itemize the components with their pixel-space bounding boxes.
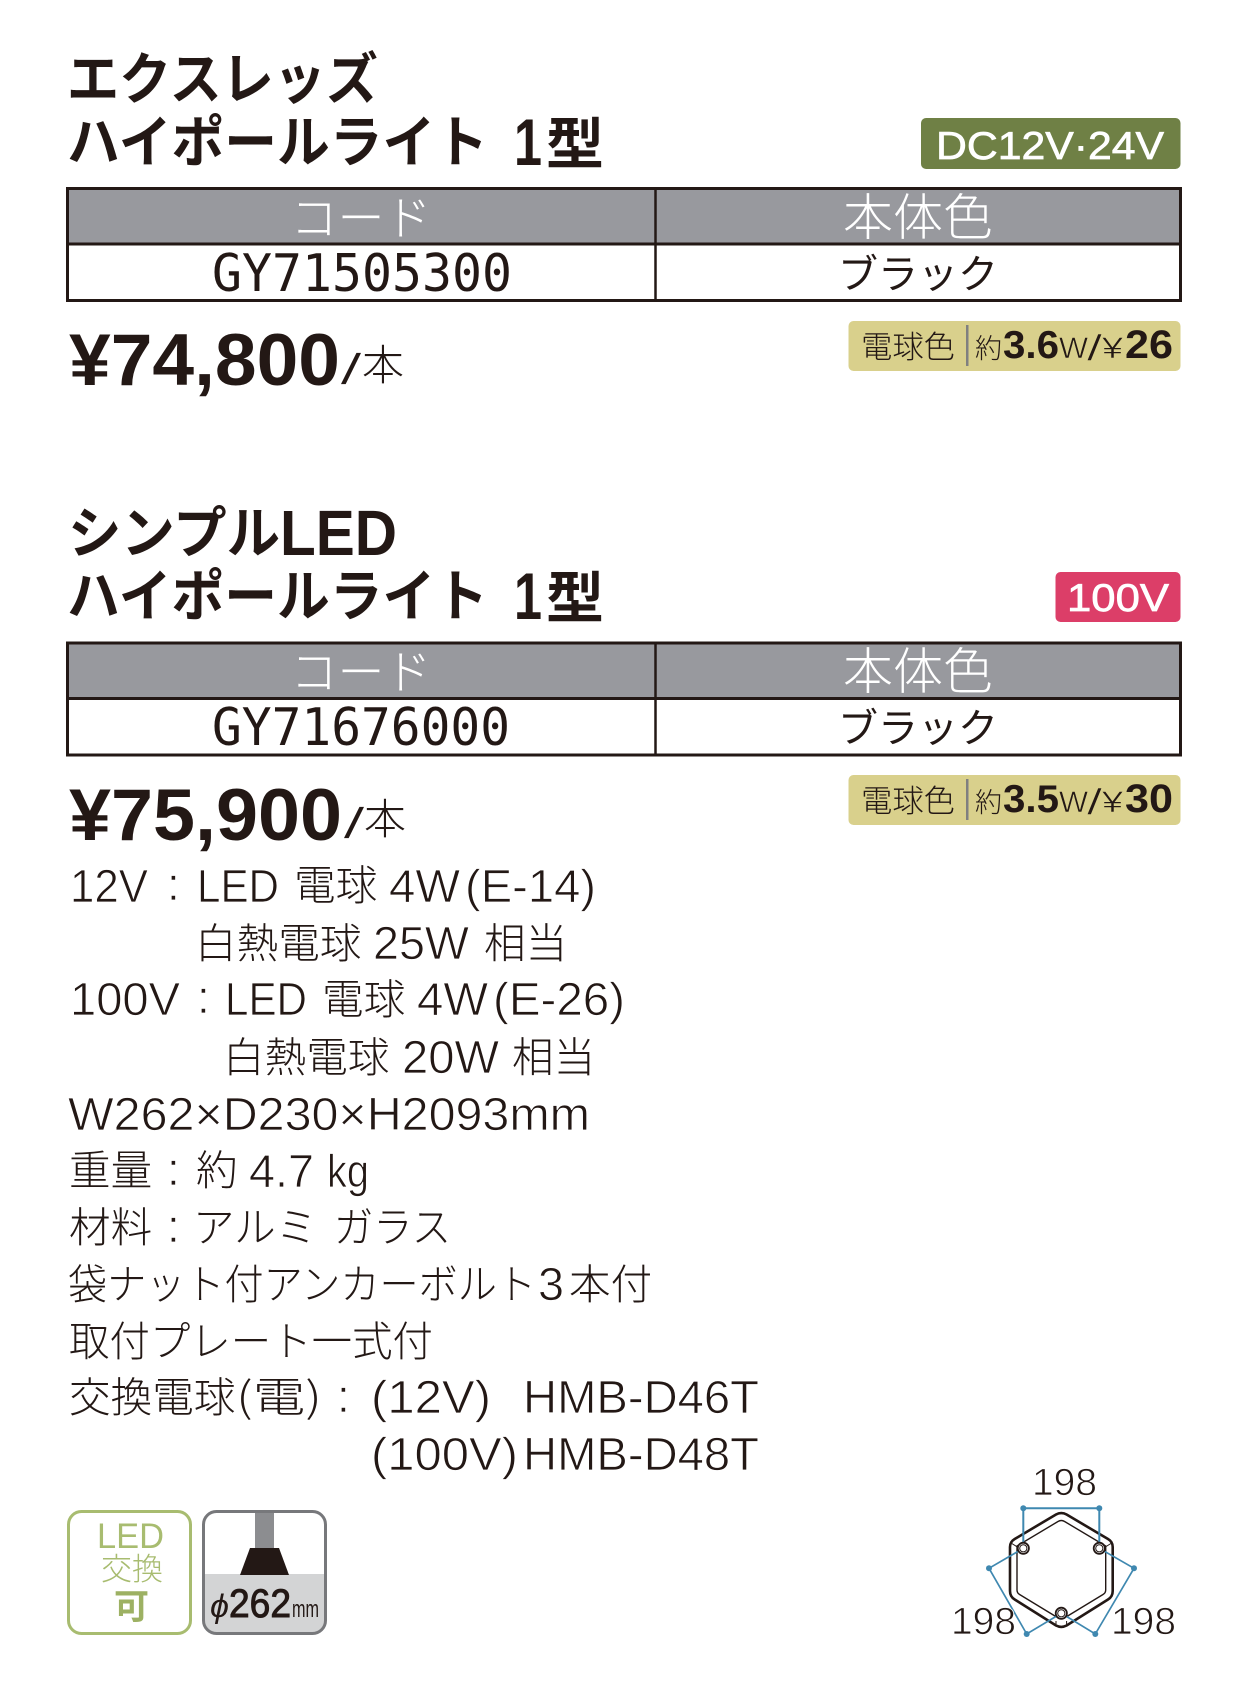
specification text block: 交換電球 xyxy=(69,1364,235,1424)
lamp colour badge: 電球色 約3.5W/¥30 xyxy=(848,775,1180,825)
title: シンプルLED ハイポールライト 1型: LED xyxy=(280,497,397,569)
specification text block: LED xyxy=(197,860,279,912)
specification text block: LED xyxy=(225,973,307,1025)
specification text block: (100V) xyxy=(371,1428,518,1480)
specification text block: 白熱電球 xyxy=(223,1024,389,1084)
lamp colour badge: 電球色 約3.5W/¥30: W xyxy=(1059,786,1089,819)
dimension lines xyxy=(989,1508,1134,1634)
specification text block: 4W xyxy=(389,860,461,912)
specification text block: : xyxy=(167,1143,180,1195)
table: product 1 code and colour: GY71505300 xyxy=(212,244,512,304)
icon: pole base diameter 262mm xyxy=(204,1511,326,1634)
specification text block: 20W xyxy=(402,1031,500,1083)
specification text block: 4.7 xyxy=(249,1145,314,1197)
specification text block xyxy=(68,852,759,1480)
voltage badge: 100V: 100V xyxy=(1067,577,1169,620)
voltage badge: DC12V・24V xyxy=(921,118,1180,169)
lamp colour badge: 電球色 約3.6W/¥26: 約 xyxy=(975,327,1002,366)
specification text block: 重量 xyxy=(69,1137,152,1197)
title: シンプルLED ハイポールライト 1型 xyxy=(67,489,604,635)
table: product 2 code and colour: コード xyxy=(290,634,432,703)
voltage badge: 100V xyxy=(1056,572,1180,622)
mounting holes xyxy=(1018,1543,1105,1619)
lamp colour badge: 電球色 約3.6W/¥26: 26 xyxy=(1125,323,1173,367)
table: product 1 code and colour xyxy=(66,178,1182,304)
lamp colour badge: 電球色 約3.6W/¥26 xyxy=(848,321,1180,371)
price: ¥75,900/本: 本 xyxy=(364,786,406,847)
lamp colour badge: 電球色 約3.6W/¥26: 3.6 xyxy=(1003,324,1059,367)
specification text block: 電球 xyxy=(294,852,377,912)
lamp colour badge: 電球色 約3.6W/¥26: ¥ xyxy=(1101,332,1123,365)
lamp colour badge: 電球色 約3.5W/¥30: 3.5 xyxy=(1003,778,1059,821)
voltage badge: DC12V・24V: DC12V·24V xyxy=(936,125,1164,168)
price: ¥75,900/本: / xyxy=(343,799,366,848)
specification text block: アルミ xyxy=(193,1194,317,1254)
specification text block: HMB-D48T xyxy=(523,1428,759,1480)
table: product 1 code and colour: コード xyxy=(290,180,432,249)
specification text block: 相当 xyxy=(512,1024,595,1084)
table: product 2 code and colour xyxy=(66,632,1182,758)
title: エクスレッズ ハイポールライト 1型: ハイポールライト xyxy=(67,98,488,179)
price: ¥74,800/本: ¥74,800 xyxy=(69,320,340,401)
icon: pole base diameter 262mm: mm xyxy=(292,1596,319,1623)
specification text block: 12V xyxy=(70,860,148,912)
specification text block: 本付 xyxy=(569,1251,652,1311)
specification text block: 電球 xyxy=(322,966,405,1026)
specification text block: ガラス xyxy=(334,1194,451,1254)
specification text block: 3 xyxy=(538,1258,564,1310)
lamp colour badge: 電球色 約3.5W/¥30: / xyxy=(1087,781,1102,822)
lamp colour badge: 電球色 約3.5W/¥30: ¥ xyxy=(1101,786,1123,819)
specification text block: : xyxy=(167,858,180,910)
icon: pole base diameter 262mm: 262 xyxy=(229,1582,291,1626)
price: ¥75,900/本: ¥75,900 xyxy=(69,775,342,856)
specification text block: HMB-D46T xyxy=(523,1371,759,1423)
lamp colour badge: 電球色 約3.6W/¥26: W xyxy=(1059,332,1089,365)
price: ¥74,800/本: / xyxy=(340,345,363,394)
title: シンプルLED ハイポールライト 1型: 1 xyxy=(514,559,542,633)
specification text block: : xyxy=(167,1200,180,1252)
title: エクスレッズ ハイポールライト 1型: 1 xyxy=(514,105,542,179)
lamp colour badge: 電球色 約3.6W/¥26: 電球色 xyxy=(861,322,955,367)
specification text block: 相当 xyxy=(484,910,567,970)
icon: LED replacement possible xyxy=(68,1512,190,1634)
lamp colour badge: 電球色 約3.6W/¥26: / xyxy=(1087,327,1102,368)
specification text block: : xyxy=(337,1370,350,1422)
diagram: hexagonal base plate with 198mm bolt spacing xyxy=(951,1462,1176,1643)
dimension labels: 198 xyxy=(951,1601,1016,1643)
icon: LED replacement possible: 可 xyxy=(114,1579,149,1630)
specification text block: (12V) xyxy=(371,1371,491,1423)
specification text block: 材料 xyxy=(69,1194,152,1254)
lamp colour badge: 電球色 約3.5W/¥30: 電球色 xyxy=(861,776,955,821)
table: product 2 code and colour: ブラック xyxy=(838,707,998,751)
title: エクスレッズ ハイポールライト 1型: エクスレッズ xyxy=(67,35,378,116)
lamp colour badge: 電球色 約3.5W/¥30: 約 xyxy=(975,781,1002,820)
icon: LED replacement possible: LED xyxy=(97,1517,164,1556)
dimension labels: 198 xyxy=(1111,1601,1176,1643)
dimension labels: 198 xyxy=(1032,1462,1097,1504)
icon: LED replacement possible: 交換 xyxy=(101,1544,163,1589)
title: シンプルLED ハイポールライト 1型: 型 xyxy=(546,554,604,635)
dimension end points xyxy=(986,1505,1137,1637)
table: product 2 code and colour: GY71676000 xyxy=(212,698,510,758)
title: シンプルLED ハイポールライト 1型: シンプル xyxy=(68,489,280,570)
specification text block: 白熱電球 xyxy=(195,910,361,970)
specification text block: 袋ナット付アンカーボルト xyxy=(68,1251,536,1311)
specification text block: 4W xyxy=(417,973,489,1025)
title: エクスレッズ ハイポールライト 1型: 型 xyxy=(546,100,604,181)
icon: pole base diameter 262mm: ϕ xyxy=(210,1588,229,1624)
specification text block: 100V xyxy=(70,973,180,1025)
dimension labels xyxy=(951,1462,1176,1643)
specification text block: 25W xyxy=(373,917,470,969)
specification text block: 取付プレート一式付 xyxy=(69,1308,433,1368)
specification text block: : xyxy=(197,971,210,1023)
specification text block: kg xyxy=(327,1145,369,1197)
lamp colour badge: 電球色 約3.5W/¥30: 30 xyxy=(1125,777,1173,821)
table: product 1 code and colour: 本体色 xyxy=(843,178,993,250)
specification text block: (電) xyxy=(236,1364,322,1424)
title: エクスレッズ ハイポールライト 1型 xyxy=(67,35,604,181)
base plate outline xyxy=(1010,1513,1113,1627)
specification text block: 約 xyxy=(196,1137,238,1197)
table: product 2 code and colour: 本体色 xyxy=(843,632,993,704)
specification text block: (E-26) xyxy=(493,973,625,1025)
specification text block: (E-14) xyxy=(465,860,596,912)
table: product 1 code and colour: ブラック xyxy=(838,253,998,297)
title: シンプルLED ハイポールライト 1型: ハイポールライト xyxy=(67,552,488,633)
specification text block: W262×D230×H2093mm xyxy=(68,1088,590,1140)
price: ¥74,800/本: 本 xyxy=(362,332,404,393)
